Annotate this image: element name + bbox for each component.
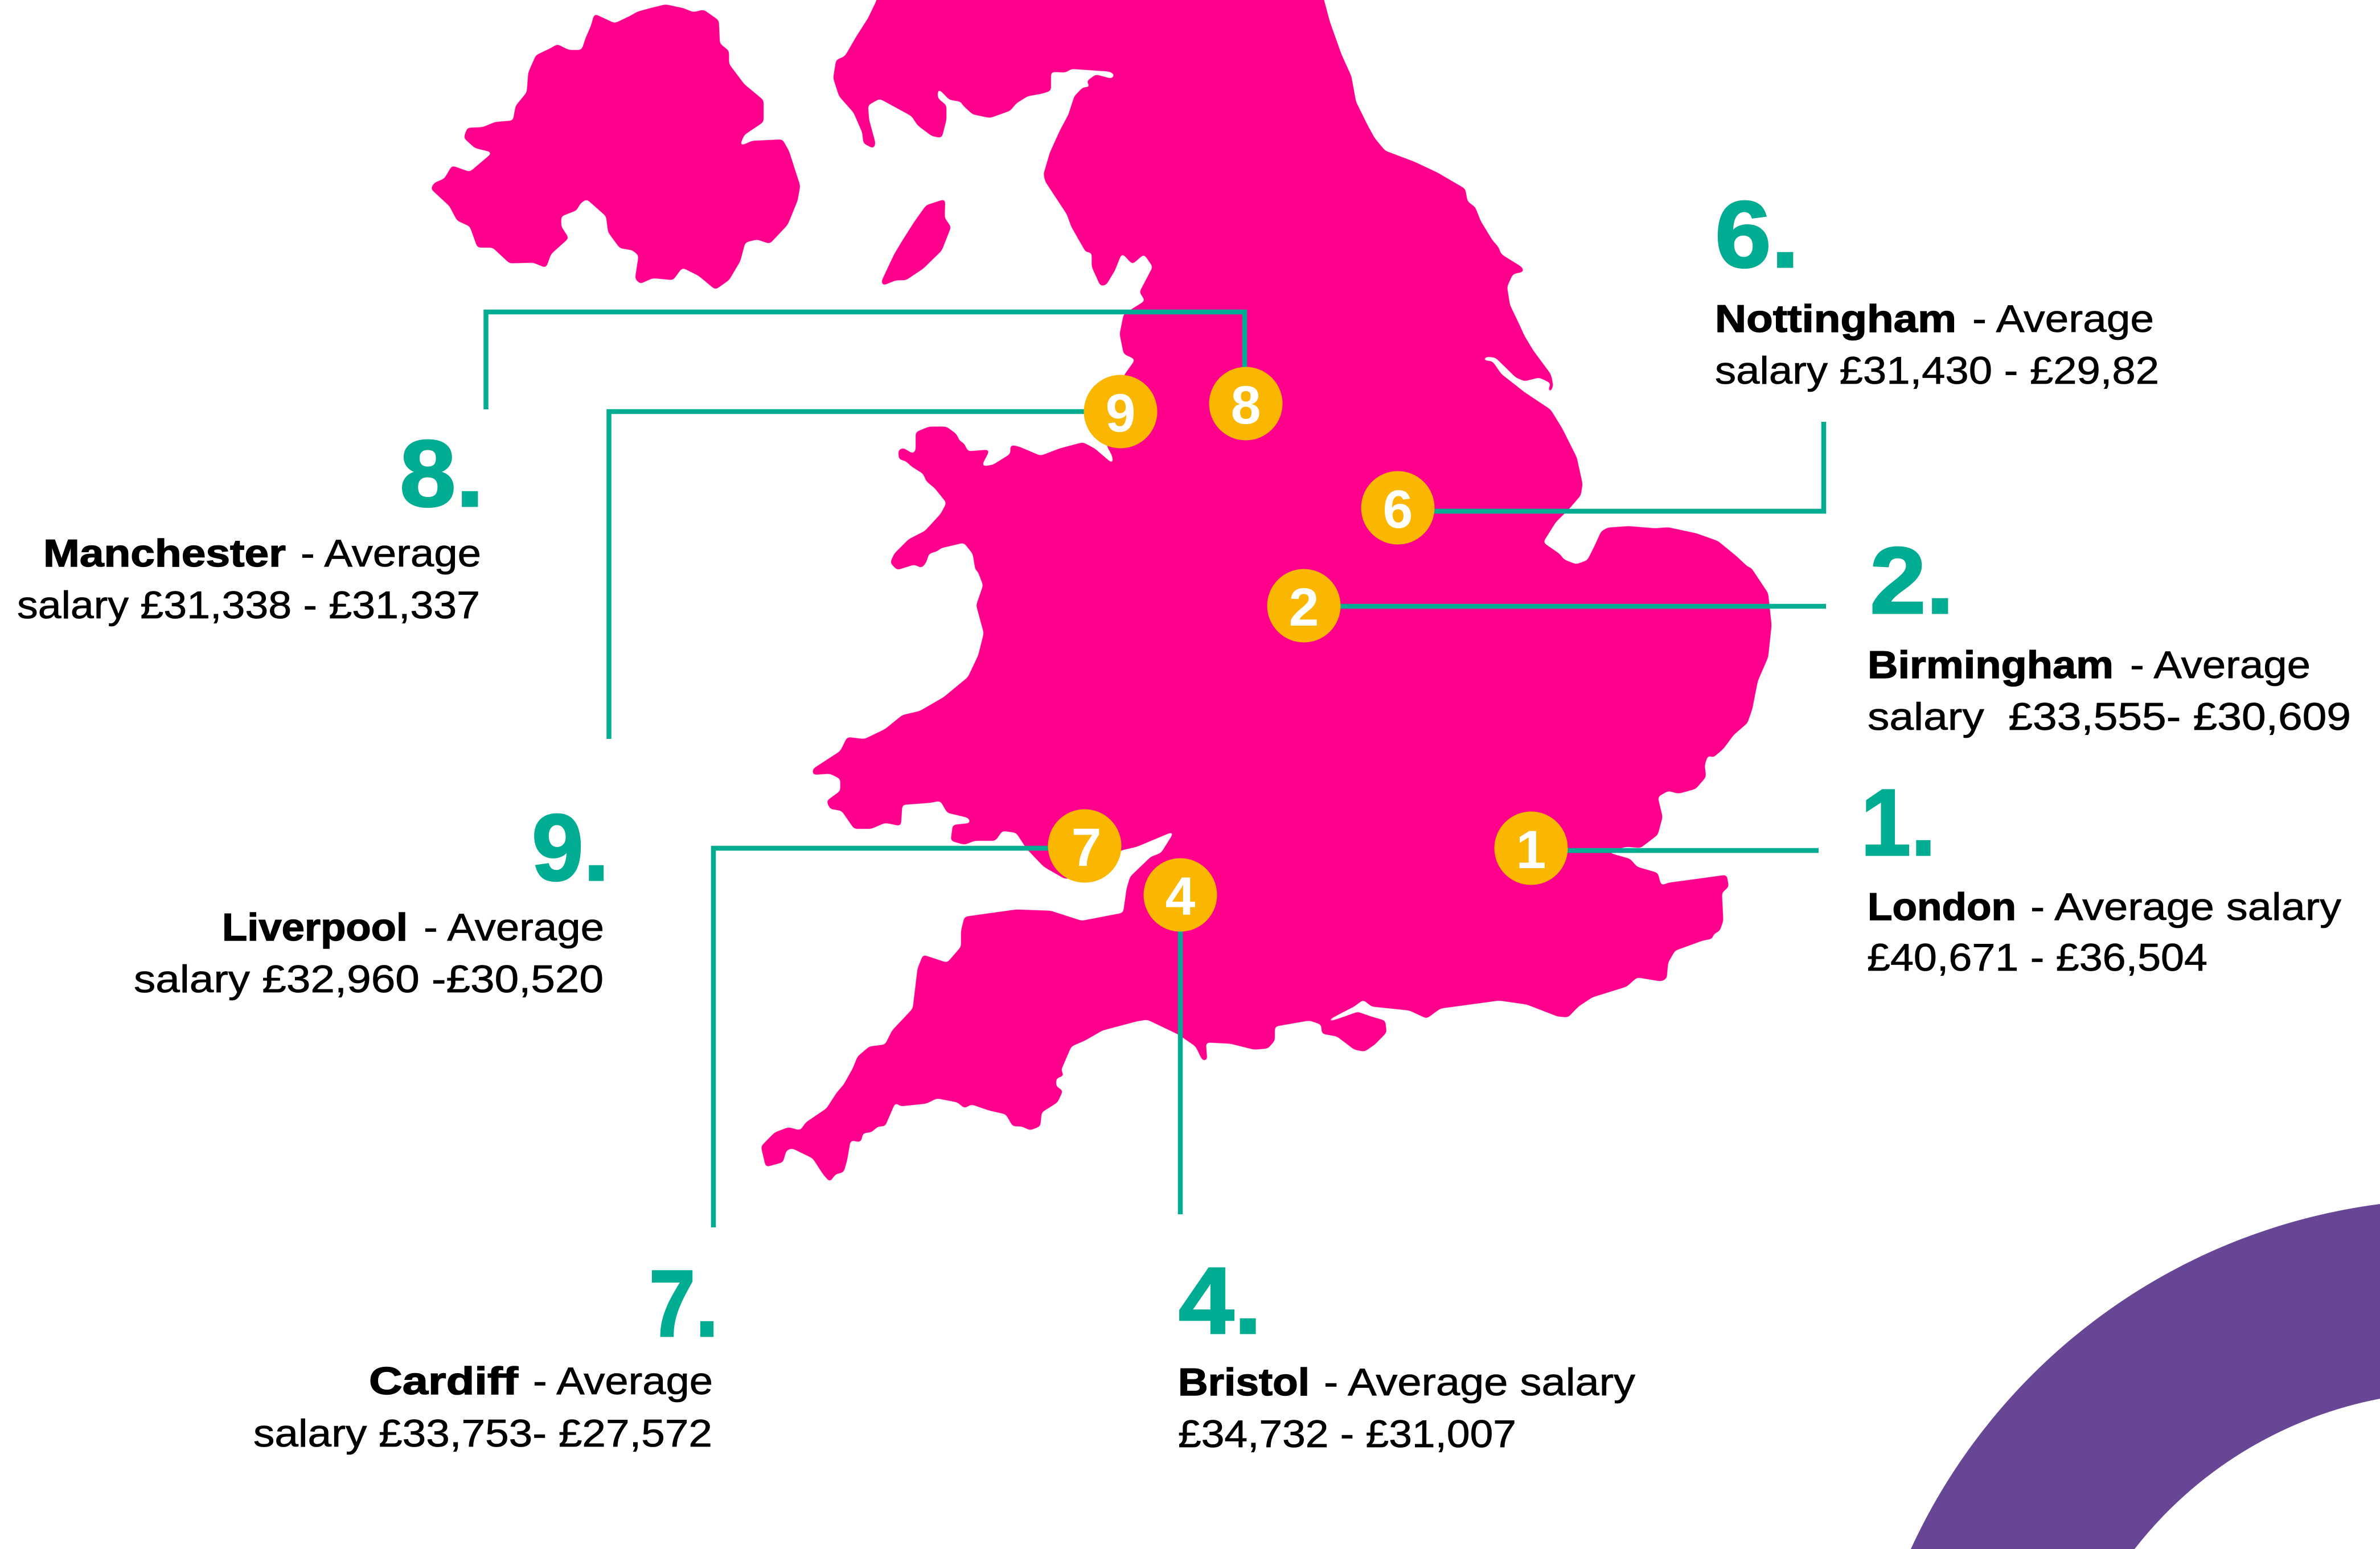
callout: 4 Bristol: 4. xyxy=(1179,1248,1262,1354)
callout: 7 Cardiff: salary £33,753- £27,572 xyxy=(253,1412,712,1455)
callout: 9 Liverpool: 9. xyxy=(532,795,609,901)
callout: 8 Manchester: - Average xyxy=(301,532,481,575)
map marker 4 xyxy=(1143,858,1217,931)
connector line: 7 Cardiff xyxy=(713,848,1059,1227)
callout: 9 Liverpool: Liverpool xyxy=(222,906,408,949)
callout: 8 Manchester xyxy=(17,421,484,627)
callout: 9 Liverpool xyxy=(134,795,609,1001)
map marker 6: 6 xyxy=(1383,479,1413,540)
callout: 7 Cardiff: Cardiff xyxy=(369,1359,518,1403)
callout: 6 Nottingham: - Average xyxy=(1972,297,2154,340)
map marker 8: 8 xyxy=(1231,375,1261,435)
callout: 6 Nottingham: 6. xyxy=(1715,182,1799,287)
callout: 1 London: £40,671 - £36,504 xyxy=(1867,936,2207,979)
callout: 6 Nottingham xyxy=(1715,182,2159,392)
map: Isle of Man xyxy=(881,199,951,286)
connector line: 2 Birmingham xyxy=(1332,604,1826,609)
map marker 7: 7 xyxy=(1072,817,1101,878)
callout: 6 Nottingham: Nottingham xyxy=(1715,297,1956,340)
callout: 2 Birmingham xyxy=(1868,528,2351,738)
map marker 2 xyxy=(1267,569,1340,642)
callout: 1 London: - Average salary xyxy=(2030,885,2341,928)
connector line: 9 Liverpool xyxy=(609,412,1099,739)
connector line: 6 Nottingham xyxy=(1423,422,1824,511)
callout: 1 London: London xyxy=(1868,885,2016,928)
callout: 6 Nottingham: salary £31,430 - £29,82 xyxy=(1715,349,2159,392)
purple arc decoration xyxy=(1911,1204,2380,1549)
callout: 7 Cardiff: - Average xyxy=(533,1359,713,1403)
connector line: 1 London xyxy=(1560,848,1819,853)
map marker 6 xyxy=(1361,471,1435,544)
callout: 8 Manchester: Manchester xyxy=(43,532,286,575)
callout: 1 London: 1. xyxy=(1861,770,1936,876)
callout: 4 Bristol: £34,732 - £31,007 xyxy=(1178,1412,1516,1456)
callout: 8 Manchester: 8. xyxy=(400,421,484,527)
map marker 7 xyxy=(1048,810,1122,882)
map marker 9: 9 xyxy=(1106,383,1135,443)
map: Northern Ireland xyxy=(430,5,800,290)
map: Great Britain mainland xyxy=(761,0,1771,1182)
callout: 8 Manchester: salary £31,338 - £31,337 xyxy=(17,584,480,627)
map marker 2: 2 xyxy=(1289,577,1319,638)
callout: 4 Bristol: Bristol xyxy=(1178,1361,1310,1404)
callout: 9 Liverpool: salary £32,960 -£30,520 xyxy=(134,958,604,1001)
callout: 7 Cardiff: 7. xyxy=(649,1251,719,1357)
callout: 2 Birmingham: Birmingham xyxy=(1868,643,2114,687)
map marker 1 xyxy=(1494,812,1568,885)
callout: 1 London xyxy=(1861,770,2341,979)
connector line: 4 Bristol xyxy=(1178,928,1183,1214)
map marker 8 xyxy=(1209,367,1282,441)
callout: 2 Birmingham: - Average xyxy=(2130,643,2311,687)
callout: 4 Bristol xyxy=(1178,1248,1635,1456)
callout: 9 Liverpool: - Average xyxy=(424,906,604,949)
callout: 2 Birmingham: 2. xyxy=(1870,528,1954,634)
callout: 2 Birmingham: salary £33,555- £30,609 xyxy=(1868,695,2351,738)
map marker 1: 1 xyxy=(1516,820,1546,880)
map marker 9 xyxy=(1084,375,1157,449)
callout: 7 Cardiff xyxy=(253,1251,719,1455)
connector line: 8 Manchester xyxy=(486,312,1245,409)
map marker 4: 4 xyxy=(1166,866,1196,927)
callout: 4 Bristol: - Average salary xyxy=(1324,1361,1635,1404)
